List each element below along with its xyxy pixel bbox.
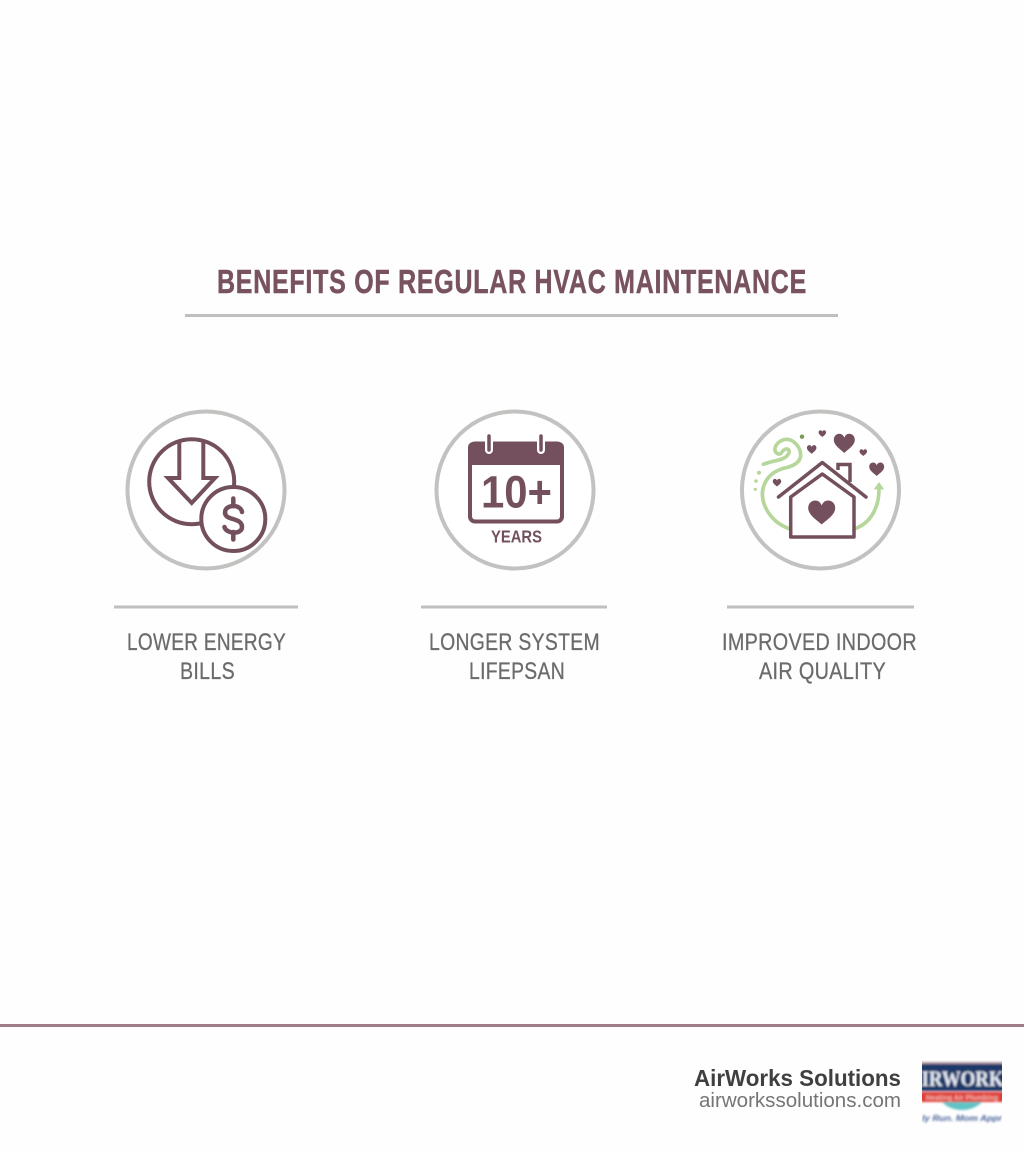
panel: longer system lifespan (421, 412, 607, 685)
footer: company logo: ly Run. Mom Appr (922, 1113, 1003, 1123)
icon: arrow down and dollar coin (128, 412, 284, 568)
footer: company name and website: AirWorks Solutions (694, 1065, 901, 1091)
label: longer system lifespan (429, 629, 600, 685)
label: longer system lifespan: LIFEPSAN (469, 658, 565, 685)
label: longer system lifespan: LONGER SYSTEM (429, 629, 600, 656)
label: improved indoor air quality (722, 629, 917, 685)
label: lower energy bills: LOWER ENERGY (127, 629, 286, 656)
footer: company name and website (694, 1065, 901, 1112)
icon: calendar 10+ years: 10+ (481, 466, 552, 518)
panel: lower energy bills (114, 412, 298, 685)
footer: company name and website: airworkssolutions.com (699, 1090, 901, 1112)
footer: company logo: Heating Air Plumbing (926, 1095, 998, 1102)
label: lower energy bills: BILLS (180, 658, 235, 685)
label: improved indoor air quality: IMPROVED INDOOR (722, 629, 917, 656)
title: BENEFITS OF REGULAR HVAC MAINTENANCE (217, 263, 807, 300)
footer: company logo (922, 1060, 1002, 1124)
label: lower energy bills (127, 629, 286, 685)
footer divider (0, 1024, 1024, 1027)
title (185, 263, 838, 317)
icon: calendar 10+ years: YEARS (491, 526, 542, 546)
panel: improved indoor air quality (722, 412, 917, 685)
icon: calendar 10+ years (436, 412, 594, 568)
label: improved indoor air quality: AIR QUALITY (759, 658, 886, 685)
icon: house with hearts and green air swirl (742, 412, 899, 568)
